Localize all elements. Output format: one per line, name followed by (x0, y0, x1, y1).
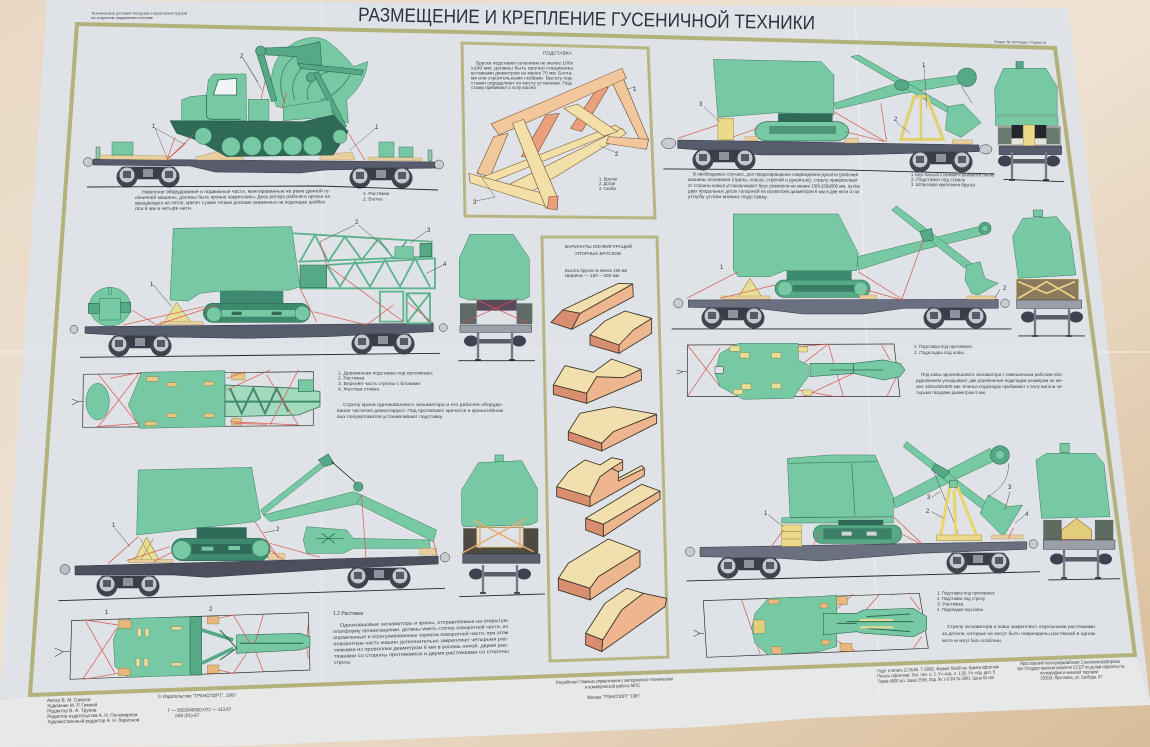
lashings (108, 495, 437, 563)
lattice boom (293, 233, 435, 323)
panel: stand (462, 43, 655, 218)
supports (128, 537, 437, 563)
description text: углубу углом можно подставку. (688, 194, 768, 200)
lashings (167, 134, 366, 162)
lashings (678, 103, 887, 142)
description text: тяжками со стороны противовеса и двумя растяжками со стороны (334, 650, 510, 660)
footer: authors: Редактор издательства А. Н. Пономарева (47, 712, 138, 720)
variants dimensions (565, 268, 627, 279)
description text: оправленные и отрегулированные тормоза поворотной части, при этом (333, 629, 508, 641)
undercarriage (172, 527, 270, 561)
numbers: 2 (894, 117, 898, 123)
numbers: 1 (922, 63, 926, 69)
bogies 3 (96, 568, 410, 596)
numbers 3 (105, 523, 280, 616)
stand legend (473, 87, 637, 206)
note top right: Плакат № 30 Раздел. Рядом 14 (994, 40, 1046, 45)
footer: copyright (158, 692, 237, 720)
legend: 2. Болты (363, 196, 383, 202)
flatcar 5 (672, 299, 1012, 329)
tracked vehicle with cab (170, 74, 348, 157)
stand leaders (476, 87, 635, 201)
leaders and numbers (152, 54, 379, 158)
description text: Навесное оборудование и подвижные части, монтированные на раме данной гу- (142, 187, 330, 195)
legend: 3. Штанговая крепления бруска (911, 182, 975, 188)
undercarriage (782, 518, 902, 543)
end view (995, 62, 1064, 182)
description text: Стрелу крана одноковшового экскаватора и его рабочее оборудо- (343, 402, 503, 408)
variants frame (542, 237, 668, 661)
description text (916, 372, 1063, 396)
number labels: 1 (764, 511, 768, 517)
number labels (720, 265, 1007, 292)
leaders (768, 492, 1025, 527)
numbers 2: 1 (150, 282, 154, 288)
stand heading: ПОДСТАВКА (543, 50, 573, 56)
counterweight (88, 287, 131, 326)
footer: print data: Подп. в печать 22.06.86. Т-15082. Формат 60х90 см. Бумага офсетная (877, 664, 999, 674)
footer: printing house: при Государственном комитете СССР по делам издательств, (1017, 664, 1125, 672)
footer: authors: Автор В. М. Савеев (47, 697, 91, 704)
variants heading (565, 242, 633, 257)
footer: printing house: полиграфии и книжной торговли (1040, 668, 1098, 677)
numbers 2: 3 (427, 228, 431, 234)
stand text: х100 мм; должны быть прочно соединены (471, 66, 574, 72)
legend: 3. Верхняя часть стрелы с блоками (338, 381, 420, 387)
numbers (153, 225, 443, 307)
end truck 2 (464, 332, 526, 360)
undercarriage (203, 291, 310, 322)
boom (834, 55, 981, 137)
wooden truss drawing (469, 68, 649, 210)
description text: Одноковшовые экскаваторы и краны, отправляемые на открытую (340, 618, 508, 629)
end truck 5 (1021, 308, 1083, 336)
number labels: 2 (1003, 286, 1007, 292)
description text: за детали, которые не могут быть повреждены растяжкой в одном (942, 630, 1095, 637)
description text: сеничной машины, должны быть прочно закреплены. Диск ротора рабочего органа на (135, 193, 330, 201)
legend: 1. Растяжки (363, 191, 390, 197)
leaders and numbers: 1 (375, 125, 379, 131)
description text (135, 187, 331, 212)
body (713, 59, 834, 117)
pedestal and blocks (722, 278, 995, 299)
footer: authors: Художник М. Р. Гимкой (47, 701, 98, 709)
note top left (91, 12, 187, 20)
footer: printing house: 150014, Ярославль, ул. Свободы, 97 (1040, 674, 1103, 682)
stand legend: 2 (615, 152, 619, 158)
leaders and numbers: 1 (152, 124, 156, 130)
boom (893, 442, 1023, 537)
stand text: ставку прибивают к полу вагона. (471, 85, 537, 91)
excavator drawing (685, 442, 1120, 657)
plan view (693, 593, 928, 657)
lashings (687, 240, 923, 300)
bogies 6 (718, 552, 1010, 578)
end truck 6 (1050, 550, 1112, 578)
end view (1013, 210, 1085, 336)
footer: authors: Художественный редактор А. Н. Ларионов (47, 716, 140, 725)
end truck 3 (469, 565, 531, 593)
variants dimensions: Ширина — 150 – 200 мм (565, 273, 619, 279)
footer: publisher (556, 676, 674, 702)
pedestal (937, 481, 1023, 541)
boom (857, 206, 998, 295)
numbers 3: 2 (209, 607, 213, 613)
stand text: вставками диаметром не менее 70 мм. Болта- (471, 70, 573, 76)
description text: Под ковш одноковшового экскаватора с навешенным рабочим обо- (921, 372, 1063, 378)
footer: publisher: Москва "ТРАНСПОРТ" 1987 (587, 693, 640, 701)
description text: стрелы. (334, 660, 352, 666)
footer: copyright: © Издательство "ТРАНСПОРТ", 1987 (158, 692, 236, 700)
description text: В необходимых случаях, для предотвращения повреждения рукояти (рабочей (693, 171, 858, 178)
stand text: Бруски подставки сечением не менее 100х (476, 60, 574, 66)
lashings (770, 517, 1013, 548)
stand text: ставки определяют по месту установки. Под- (471, 80, 573, 86)
flatcar 3 (58, 553, 450, 601)
variants heading: ВАРИАНТЫ КОНФИГУРАЦИЙ (565, 242, 633, 250)
numbers 3: 1 (105, 610, 109, 616)
number labels: 3 (1008, 485, 1012, 491)
legend: 2. Подкладка под ковш (914, 350, 964, 356)
end view (459, 455, 545, 597)
leaders and numbers: 2 (240, 54, 244, 60)
section heading: 1.2 Растяжки (333, 611, 363, 617)
description text: месте не могут быть ослаблены. (942, 638, 1002, 644)
numbers 3: 2 (276, 527, 280, 533)
legend (911, 171, 994, 189)
legend: 2. Подставка под стрелу (911, 177, 966, 183)
stand text (471, 60, 574, 91)
excavator drawing (672, 206, 1085, 399)
pedestal and blocks (718, 97, 972, 144)
legend: 3. Растяжка (937, 602, 964, 608)
end view (458, 234, 535, 361)
description text: поворотную часть машин дополнительно закрепляют четырьмя рас- (333, 637, 509, 647)
description text: вращающего на петле, крепят к раме тягами досками уваженных на подкладке шайбах (135, 198, 326, 206)
stand legend: 1 (633, 87, 637, 93)
legend: 1. Брус большого сечения и загибается (тягой) (911, 171, 994, 179)
panel: support block variants (542, 237, 668, 661)
leaders (115, 528, 275, 547)
numbers 2: 4 (443, 262, 447, 268)
brick support (782, 525, 802, 546)
panel: crane excavator (70, 220, 535, 428)
end view (1036, 443, 1120, 580)
stand legend: 3. Скобы (599, 186, 616, 191)
legend (937, 590, 996, 613)
numbers: 3 (699, 102, 703, 108)
legend: 2. Подставка под стрелу (937, 596, 986, 602)
dragline drawing (55, 454, 545, 679)
numbers 2 (150, 220, 447, 288)
description text: нее 150х150х500 мм. Клинья подкладок прибивают к полу вагона че- (916, 384, 1063, 390)
undercarriage (755, 113, 849, 141)
disc attachment (256, 38, 368, 128)
plan view (55, 613, 310, 679)
description text: тяжками из проволоки диаметром 6 мм в восемь нитей: двумя рас- (334, 641, 509, 654)
crane drawing (70, 225, 535, 428)
description text (337, 402, 503, 420)
support stand (160, 302, 203, 325)
legend: 1. Подставка под противовес (914, 344, 973, 350)
legend (338, 370, 434, 392)
body (137, 467, 261, 535)
number labels: 3 (927, 495, 931, 501)
description text: рудованием укладывают две деревянные подкладки размером не ме- (916, 379, 1063, 384)
footer: publisher: Разработан Главным управлением с материально-техническим (556, 676, 673, 686)
panel: dragline excavator (55, 454, 545, 679)
footer: printing house (1017, 658, 1125, 682)
footer: authors (47, 696, 140, 725)
legend: 4. Жесткая стяжка (338, 386, 379, 392)
description text: вых полуавтоматов устанавливают подставку. (337, 415, 443, 420)
end truck 4 (998, 152, 1060, 180)
stand legend: 2. Доски (599, 181, 616, 186)
note top left: на открытом подвижном составе (91, 16, 153, 20)
panel: upper right excavator (662, 55, 1064, 201)
boom blocks (300, 243, 432, 288)
description text: тырьмя гвоздями диаметром 5 мм. (916, 390, 986, 396)
description text: машины основания стрелы, ковша, стрелой и рукоятью), стрелу прикрепляют (688, 176, 859, 184)
panel: lower right excavator (685, 442, 1120, 657)
numbers 2: 2 (355, 220, 359, 226)
description text: от стороны ковша устанавливают брус размером не менее 150х150х800 мм, путём (688, 183, 860, 190)
stand legend: 1. Бруски (599, 176, 618, 182)
variants dimensions: Высота бруска не менее 150 мм (565, 268, 627, 274)
footer: print data: Печать офсетная. Усл. печ. л. 2. Уч.-изд. л. 1,56. Уч.-изд. дел. 5 (877, 670, 995, 680)
footer: copyright: 049 (01)-87 (175, 713, 200, 719)
flatcar 1 (84, 147, 444, 190)
number labels: 2 (926, 509, 930, 515)
undercarriage (775, 271, 870, 297)
description text: Стрелу экскаватора и ковш закрепляют отдельными растяжками (947, 624, 1095, 630)
bogies 4 (692, 150, 972, 172)
cargo boxes (112, 142, 413, 157)
description text: вание частично демонтируют. Под противовес крепится и кронштейном (337, 407, 503, 414)
description text: платформу организациями, должны иметь стопор поворотной части, их (333, 623, 509, 635)
wooden blocks (551, 283, 667, 652)
bogies 5 (702, 308, 986, 328)
number labels: 4 (1025, 512, 1029, 518)
variants heading: УПОРНЫХ БРУСКОВ (575, 251, 621, 257)
panel: forest machine on flatcar (84, 38, 444, 212)
legend: 2. Растяжка (338, 376, 365, 382)
footer: copyright: Т — 0502040000-072 — 113.87 (167, 707, 232, 714)
stand text: ми или строительными скобами. Высоту под- (471, 76, 573, 82)
footer: authors: Редактор В. А. Трунов (47, 708, 97, 715)
crane body (170, 227, 300, 301)
numbers (699, 63, 927, 133)
panel: middle right excavator (672, 206, 1085, 399)
description text (333, 618, 510, 666)
description text: оси 6 мм в четыре нити. (135, 206, 192, 212)
description text (942, 624, 1095, 644)
number labels (764, 485, 1029, 518)
note top left: Технические условия погрузки и крепления грузов (91, 12, 187, 16)
lashings (123, 242, 433, 325)
title: РАЗМЕЩЕНИЕ И КРЕПЛЕНИЕ ГУСЕНИЧНОЙ ТЕХНИКИ (358, 2, 815, 34)
stand frame (462, 43, 655, 218)
description text: двух продольных досок толщиной на проволоке диаметром 6 мм в две нити 4 пог (688, 187, 860, 195)
number labels: 1 (720, 265, 724, 271)
flatcar 4 (662, 138, 995, 174)
body (787, 455, 893, 517)
footer: print data (877, 664, 1000, 685)
legend: 4. Подкладка под ковш (937, 607, 983, 613)
legend: 1. Деревянная подставка под противовес (338, 370, 434, 376)
leaders (995, 289, 1000, 298)
legend: 1. Подставка под противовес (937, 590, 996, 596)
legend (363, 191, 390, 202)
numbers 3: 1 (112, 523, 116, 529)
footer: publisher: и коммерческой работы МПС (585, 682, 641, 691)
stand legend: 3 (473, 200, 477, 206)
flatcar 6 (685, 540, 1040, 581)
legend (914, 344, 973, 356)
plan view (72, 370, 320, 428)
boom and stick (261, 454, 437, 553)
body (733, 214, 858, 277)
bogies 2 (108, 334, 414, 356)
footer: print data: Тираж 4500 экз. Заказ 2586. Изд. № 1-6-3/4 № 2901. Цена 50 коп. (877, 675, 995, 685)
footer: printing house: Ярославский полиграфкомбинат Союзполиграфпрома (1020, 658, 1120, 667)
flatcar 2 (70, 323, 447, 357)
plan view (677, 343, 905, 399)
description text (688, 171, 860, 201)
